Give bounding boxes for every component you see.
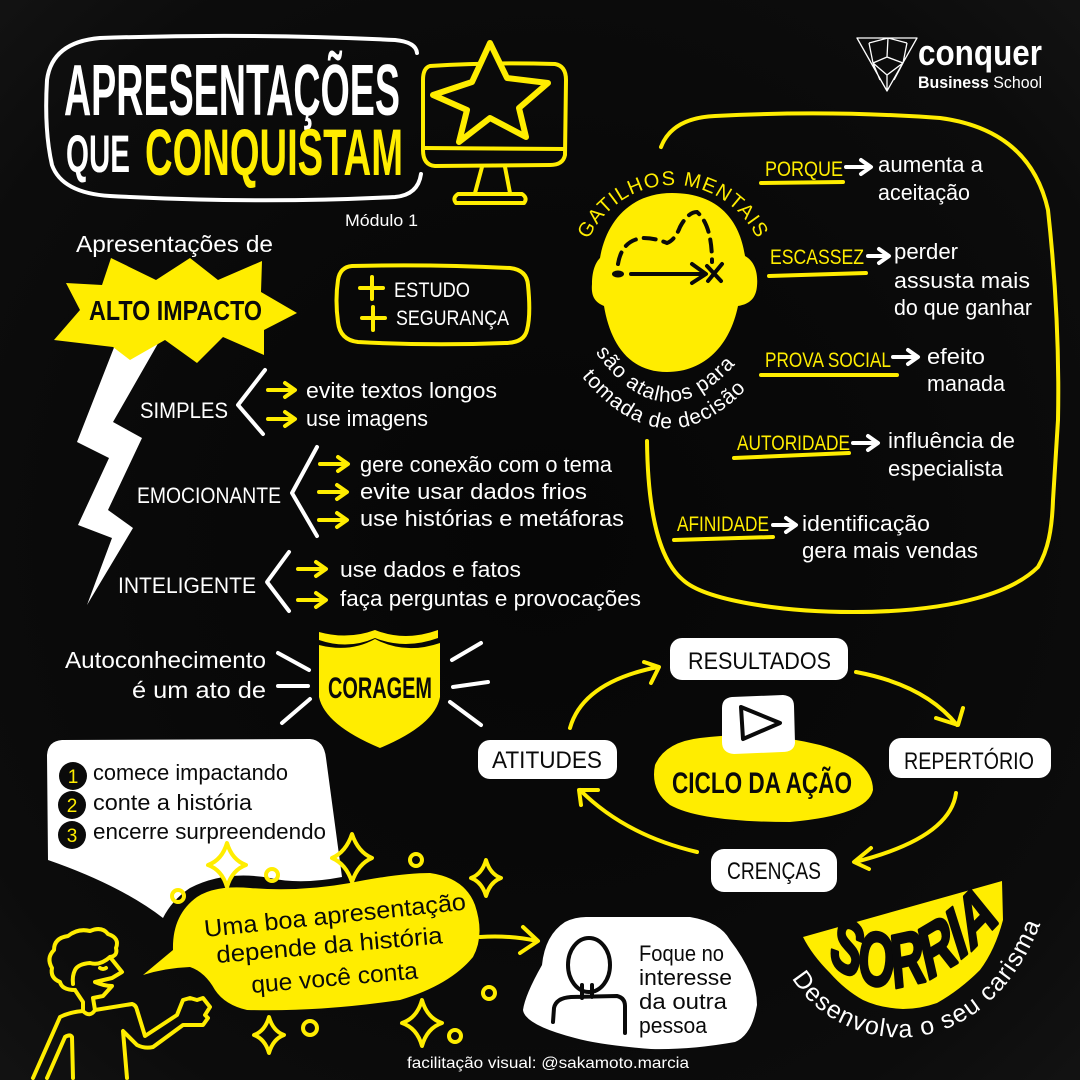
branch: simples	[140, 370, 497, 434]
trigger: porque	[761, 152, 984, 205]
text: autoconhecimento: Autoconhecimento	[65, 647, 266, 673]
speech bubble: steps	[47, 739, 342, 918]
icon: head	[592, 193, 757, 372]
step 1: comece impactando	[93, 760, 288, 785]
arrow: atitudes to resultados	[570, 662, 659, 728]
trigger: afinidade: gera mais vendas	[802, 538, 978, 563]
icon: monitor with star	[423, 43, 566, 203]
trigger: prova social: PROVA SOCIAL	[765, 349, 891, 372]
icon: logo triangle	[857, 38, 917, 91]
branch: inteligente: use dados e fatos	[340, 557, 521, 582]
trigger: autoridade	[734, 428, 1015, 481]
trigger: porque: aumenta a	[878, 152, 984, 177]
lightning bolt	[77, 340, 160, 605]
credit: facilitação visual: @sakamoto.marcia	[407, 1055, 689, 1072]
arrow: crenças to atitudes	[579, 790, 697, 852]
trigger: escassez: ESCASSEZ	[770, 246, 864, 269]
arrow: bubble to person box	[480, 927, 538, 953]
title line 2 white: QUE	[66, 125, 130, 184]
high impact section	[54, 231, 297, 605]
panel: foque no interesse: pessoa	[639, 1013, 708, 1038]
icon: shield	[319, 630, 438, 645]
trigger: afinidade	[674, 511, 978, 563]
trigger: escassez: do que ganhar	[894, 295, 1032, 320]
smile label: SORRIA	[830, 890, 999, 990]
ciclo da ação diagram	[478, 638, 1051, 892]
trigger: escassez	[769, 239, 1032, 320]
arrow: resultados to repertório	[856, 672, 963, 725]
node: atitudes	[478, 740, 617, 779]
speech bubble: story	[143, 873, 480, 1010]
bubble text line 3: que você conta	[250, 957, 420, 999]
logo: conquer business school	[857, 32, 1042, 92]
panel: foque no interesse: da outra	[639, 989, 728, 1014]
step 3: encerre surpreendendo	[93, 819, 326, 844]
panel: foque no interesse	[523, 917, 757, 1049]
branch: emocionante: use histórias e metáforas	[360, 506, 624, 531]
box: estudo e segurança	[336, 265, 529, 344]
logo subtitle: Business School	[918, 73, 1042, 92]
branch: simples: evite textos longos	[306, 378, 497, 403]
arrow: repertório to crenças	[854, 793, 956, 869]
trigger: prova social: manada	[927, 371, 1006, 396]
node: crenças: CRENÇAS	[727, 858, 821, 885]
trigger: porque: PORQUE	[765, 158, 843, 181]
node: repertório	[889, 738, 1051, 778]
trigger: prova social	[761, 344, 1006, 396]
step 2: 2	[67, 796, 77, 817]
burst shape	[54, 258, 297, 363]
trigger: escassez: perder	[894, 239, 958, 264]
logo wordmark: conquer	[918, 32, 1042, 73]
icon: presenter figure	[33, 929, 210, 1078]
trigger: afinidade: AFINIDADE	[677, 513, 769, 536]
branch: inteligente: INTELIGENTE	[118, 573, 256, 598]
step 3: 3	[67, 826, 77, 847]
title line 2 yellow: CONQUISTAM	[145, 115, 403, 189]
trigger: autoridade: influência de	[888, 428, 1015, 453]
step 2: conte a história	[93, 790, 253, 815]
title panel	[46, 36, 421, 200]
label estudo: ESTUDO	[394, 279, 470, 302]
centre blob	[654, 735, 873, 822]
step 1: 1	[68, 767, 78, 788]
module label: Módulo 1	[345, 211, 418, 230]
panel text: Foque no	[639, 941, 724, 966]
centre label: CICLO DA AÇÃO	[672, 766, 852, 800]
title line 1: APRESENTAÇÕES	[64, 50, 400, 131]
trigger: prova social: efeito	[927, 344, 985, 369]
decorative sparkles	[172, 834, 501, 1053]
panel: foque no interesse: interesse	[639, 965, 732, 990]
trigger: afinidade: identificação	[802, 511, 930, 536]
trigger: autoridade: AUTORIDADE	[737, 432, 850, 455]
branch: inteligente	[118, 552, 641, 611]
start point	[612, 270, 624, 278]
curved text: são atalhos para: são atalhos para	[597, 348, 736, 402]
arrows	[268, 383, 295, 426]
trigger: autoridade: especialista	[888, 456, 1004, 481]
branch: simples: SIMPLES	[140, 398, 228, 423]
shield label: CORAGEM	[328, 672, 432, 705]
coragem section	[65, 630, 488, 748]
heading: apresentações de: Apresentações de	[76, 231, 273, 257]
curved label: gatilhos mentais: GATILHOS MENTAIS	[578, 171, 768, 236]
target x	[707, 264, 722, 281]
branch: inteligente: faça perguntas e provocações	[340, 586, 641, 611]
branch: emocionante	[137, 447, 624, 536]
plus icons	[360, 277, 385, 330]
node: atitudes: ATITUDES	[492, 747, 602, 774]
node: repertório: REPERTÓRIO	[904, 748, 1034, 775]
straight arrow	[631, 264, 706, 283]
face	[93, 957, 122, 1010]
sorria section	[792, 881, 1040, 1038]
bubble text line 1: Uma boa apresentação	[203, 889, 467, 943]
branch: emocionante: gere conexão com o tema	[360, 452, 613, 477]
branch: emocionante: evite usar dados frios	[360, 479, 587, 504]
curved text: Desenvolva o seu carisma	[792, 922, 1040, 1038]
arrows	[319, 457, 348, 527]
frame	[647, 113, 1058, 612]
trigger: porque: aceitação	[878, 180, 970, 205]
node: crenças	[711, 849, 837, 892]
node: resultados: RESULTADOS	[688, 648, 831, 675]
node: resultados	[670, 638, 848, 680]
body	[33, 990, 210, 1078]
icon: person	[553, 938, 625, 1033]
branch: emocionante: EMOCIONANTE	[137, 483, 281, 508]
step 2	[58, 790, 253, 819]
icon: play	[722, 695, 795, 754]
text: é um ato de: é um ato de	[132, 677, 266, 703]
rays	[278, 643, 488, 725]
bubble text line 2: depende da história	[215, 922, 444, 969]
curved text: tomada de decisão: tomada de decisão	[583, 369, 744, 428]
label segurança: SEGURANÇA	[396, 307, 509, 330]
gatilhos mentais panel	[578, 111, 1060, 614]
dashed path	[618, 212, 712, 264]
smile shape	[803, 881, 1003, 1009]
branch: simples: use imagens	[306, 406, 428, 431]
arrows	[298, 562, 326, 607]
hair	[49, 929, 117, 990]
burst label: ALTO IMPACTO	[89, 295, 262, 326]
title frame	[46, 36, 421, 200]
trigger: escassez: assusta mais	[894, 268, 1030, 293]
